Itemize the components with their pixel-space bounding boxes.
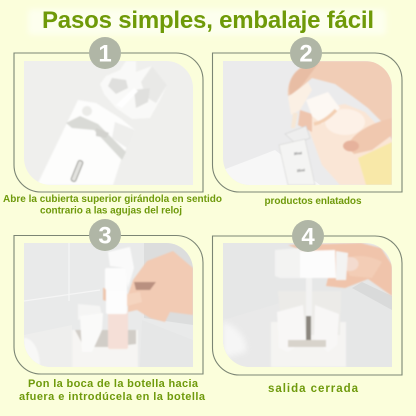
caption 3: Pon la boca de la botella hacia [28, 378, 199, 390]
cover [101, 62, 160, 118]
panel frame 3 [14, 236, 203, 374]
caption 1: Abre la cubierta superior girándola en sentido [3, 194, 222, 205]
holder [271, 322, 346, 367]
caption 2: productos enlatados [264, 196, 362, 207]
number badge 3 [89, 219, 121, 251]
panel frame 4 [212, 236, 402, 375]
photo: pouring product into small bottle [223, 61, 392, 185]
panel: step 3 [14, 219, 206, 403]
bottle [306, 104, 392, 185]
panel frame 2 [212, 53, 402, 192]
panel frame 1 [14, 53, 203, 192]
panel: step 2 [212, 37, 402, 207]
bottle [108, 311, 128, 349]
photo: pouring product into small bottle: 30ml [294, 151, 302, 156]
title: Pasos simples, embalaje fácil [42, 7, 374, 34]
photo: closing the outlet [223, 243, 392, 367]
number badge 1: 1 [98, 40, 112, 68]
number badge 2: 2 [299, 40, 313, 68]
number badge 3: 3 [98, 222, 112, 250]
hand [128, 251, 193, 322]
caption 4: salida cerrada [268, 383, 359, 395]
cap and pump [306, 92, 340, 121]
photo: inserting bottle in holder [24, 243, 193, 368]
hand [288, 61, 392, 140]
cap parts [275, 248, 300, 278]
small bottle [285, 125, 310, 138]
panel: step 1 [3, 37, 222, 205]
photo: pouring product into small bottle: 25ml [297, 168, 305, 173]
panel: step 4 [212, 220, 402, 395]
number badge 2 [290, 37, 322, 69]
number badge 4 [292, 220, 324, 252]
photo: opened bottle and rotating cover [24, 61, 193, 185]
caption 3 line 2: afuera e introdúcela en la botella [19, 391, 206, 403]
hand [288, 243, 392, 296]
number badge 4: 4 [301, 224, 315, 250]
number badge 1 [89, 37, 121, 69]
holder [72, 330, 138, 368]
caption 1 line 2: contrario a las agujas del reloj [40, 206, 182, 216]
bottle [37, 100, 135, 185]
